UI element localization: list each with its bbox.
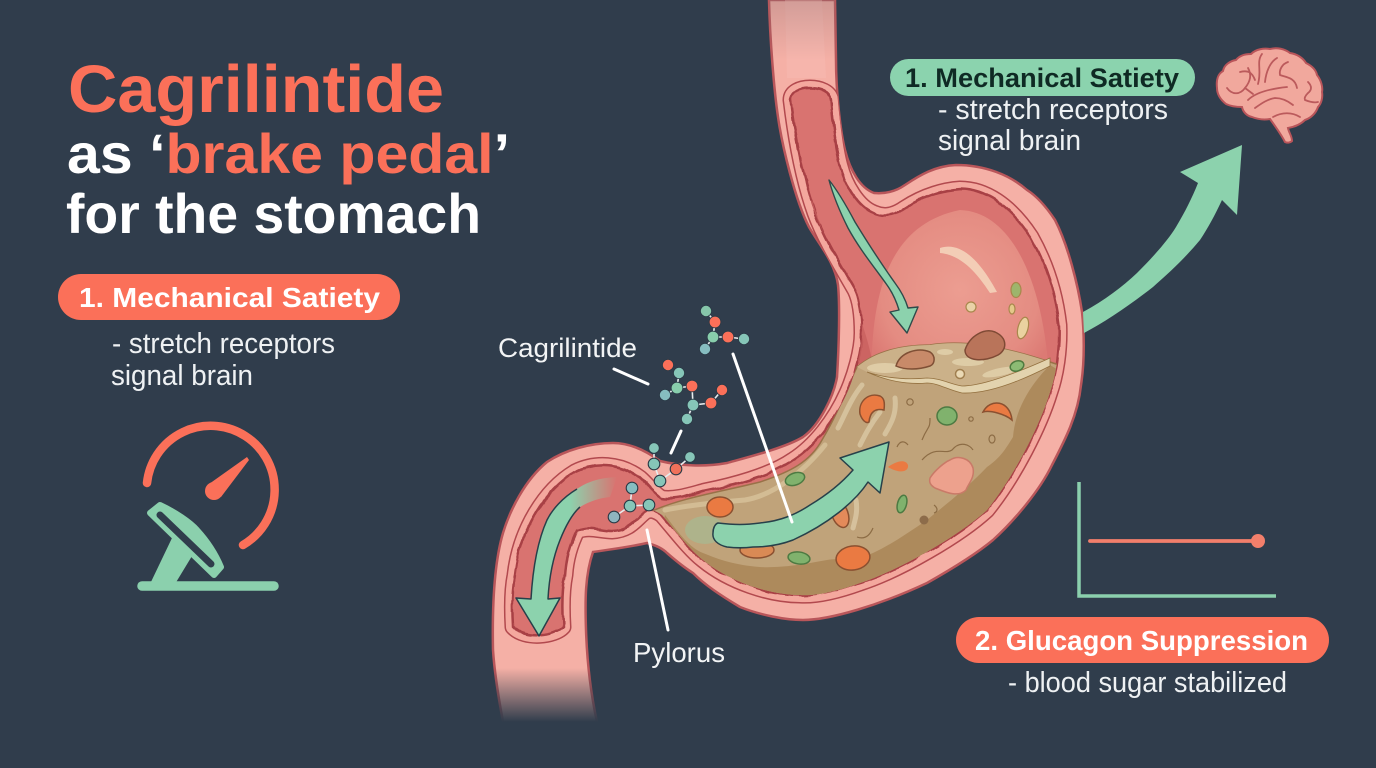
molecule: upper cagrilintide xyxy=(699,305,750,355)
upper chamber and food contents xyxy=(652,200,1057,596)
food pyloric cream streak xyxy=(665,445,825,510)
chamber folds xyxy=(811,200,871,364)
food surface patches xyxy=(867,349,1014,378)
arrow: duodenum downward xyxy=(516,477,617,636)
food dark shade xyxy=(664,366,1056,596)
chart: flat blood sugar line xyxy=(1079,482,1276,596)
right description: signal brain xyxy=(938,125,1081,157)
left description: signal brain xyxy=(111,360,253,392)
molecule: at pylorus xyxy=(648,443,695,487)
esophagus top shading xyxy=(769,0,836,60)
chamber particles xyxy=(966,282,1031,340)
food squiggles xyxy=(857,399,995,538)
molecule: middle cagrilintide xyxy=(659,359,728,425)
left pill: mechanical satiety xyxy=(58,274,400,320)
leader line for Pylorus xyxy=(647,530,668,630)
food surface cream band xyxy=(867,358,1050,393)
chamber glow xyxy=(871,210,1050,400)
stomach outer wall xyxy=(493,0,1084,722)
left pill: mechanical satiety: 1. Mechanical Satiety xyxy=(79,282,380,313)
chamber highlight xyxy=(940,247,997,293)
leader lines for Cagrilintide xyxy=(614,354,792,522)
title: as ‘brake pedal ’ xyxy=(67,122,510,185)
title: Cagrilintide xyxy=(68,52,444,127)
pill: glucagon suppression: 2. Glucagon Suppression xyxy=(975,625,1308,656)
left description xyxy=(111,328,335,392)
right description: - stretch receptors xyxy=(938,94,1168,126)
pill: glucagon suppression xyxy=(956,617,1329,663)
left description: - stretch receptors xyxy=(112,328,335,360)
fade of duodenum end xyxy=(485,668,605,724)
food mass xyxy=(652,342,1057,596)
molecule: inside antrum xyxy=(608,482,655,523)
arrow: esophagus downward xyxy=(829,180,918,333)
label: Cagrilintide: Cagrilintide xyxy=(498,333,637,363)
food pieces xyxy=(707,331,1025,572)
icon: brain xyxy=(1217,48,1322,143)
food surface top xyxy=(857,343,1044,386)
title xyxy=(66,52,510,245)
right pill: mechanical satiety: 1. Mechanical Satiety xyxy=(905,63,1179,93)
description: blood sugar stabilized: - blood sugar stabilized xyxy=(1008,667,1287,699)
icon: brake pedal and gauge xyxy=(142,426,275,586)
arrow: signal to brain xyxy=(1083,145,1242,333)
title: for the stomach xyxy=(66,182,481,245)
label: Pylorus: Pylorus xyxy=(633,637,725,668)
stomach anatomy illustration xyxy=(485,0,1084,724)
food streaks xyxy=(838,385,895,528)
stomach mucosa lining xyxy=(512,88,1059,635)
esophagus highlight xyxy=(785,0,826,78)
arrow: food toward pylorus xyxy=(685,442,889,548)
right description xyxy=(938,94,1168,157)
stomach inner ring xyxy=(512,88,1059,635)
